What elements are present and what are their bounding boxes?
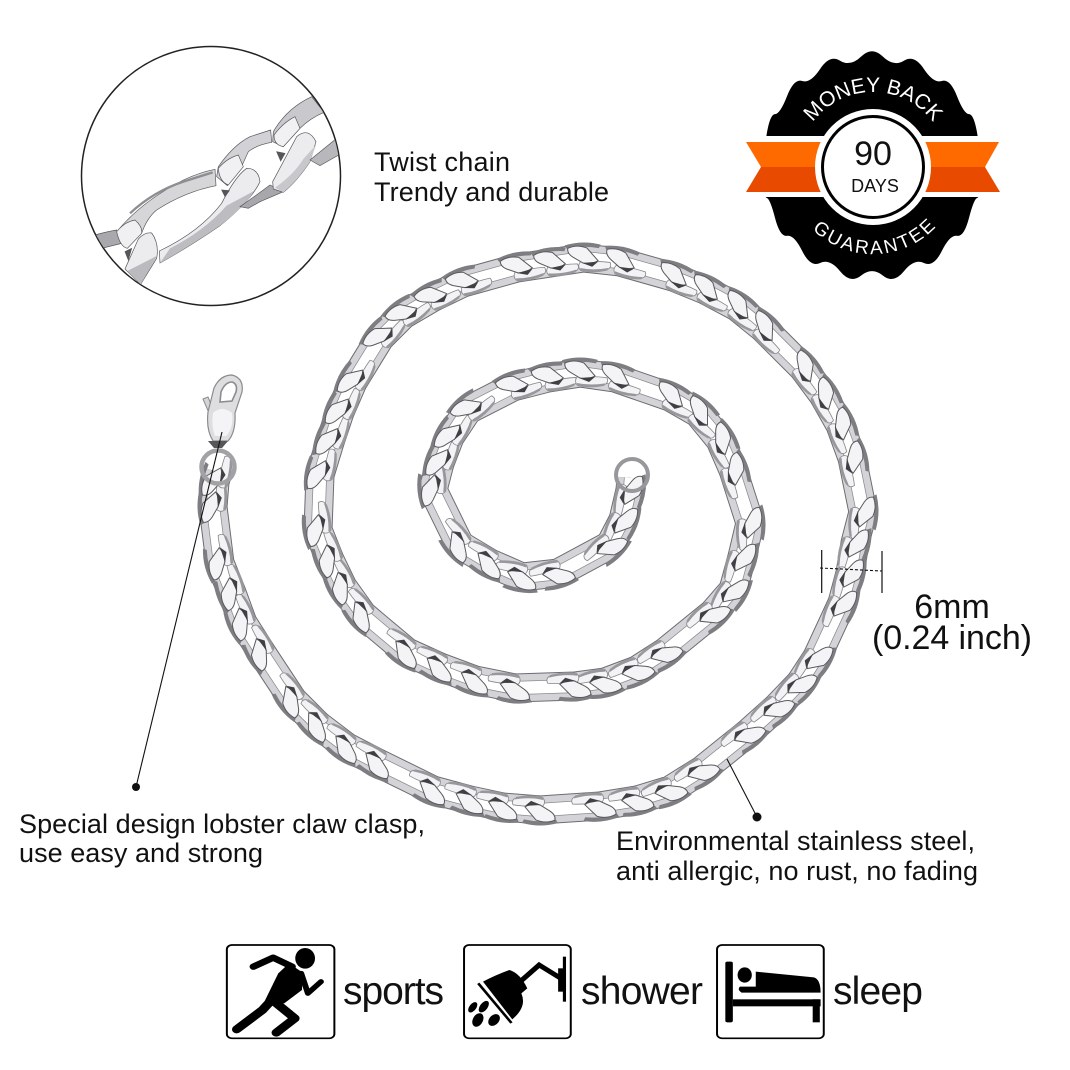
text: width measurement: (0.24 inch) (872, 619, 1032, 657)
badge: wavy black seal (762, 51, 982, 279)
text: twist chain note: Trendy and durable (374, 177, 609, 207)
text: steel note: Environmental stainless steel, (616, 826, 975, 856)
text: clasp note (19, 809, 425, 868)
icon: shower (464, 945, 571, 1038)
badge: days: DAYS (851, 176, 899, 196)
chain: links (213, 258, 863, 810)
chain: clasp ring (202, 450, 234, 484)
badge: centre ring (815, 109, 931, 225)
text: width measurement (872, 588, 1032, 657)
leader line: clasp (132, 432, 222, 791)
text: clasp note: Special design lobster claw clasp, (19, 809, 425, 839)
label: sleep: sleep (833, 970, 923, 1013)
text: clasp note: use easy and strong (19, 838, 263, 868)
text: twist chain note: Twist chain (374, 147, 510, 177)
leader line: stainless steel (727, 759, 762, 822)
label: sports: sports (343, 970, 444, 1013)
width dimension marks (820, 550, 882, 593)
badge: 90 days money back guarantee (746, 51, 1000, 279)
label: shower: shower (581, 970, 703, 1013)
badge: guarantee arc: GUARANTEE (815, 218, 936, 254)
icon: sports runner (227, 945, 334, 1038)
text: steel note: anti allergic, no rust, no fading (616, 856, 978, 886)
chain: end ring (616, 459, 648, 491)
zoom lens: twist chain detail (82, 46, 342, 306)
ribbon: right tail (925, 142, 1000, 192)
text: steel note (616, 826, 978, 886)
text: width measurement: 6mm (914, 588, 990, 626)
text: twist chain note (374, 147, 609, 207)
badge: money back arc: MONEY BACK (803, 78, 944, 122)
icon: sleep bed (717, 945, 824, 1038)
clasp: lobster claw (203, 375, 242, 448)
badge: 90: 90 (854, 135, 892, 173)
ribbon: left tail (746, 142, 821, 192)
chain: spiral figaro necklace (202, 258, 863, 810)
